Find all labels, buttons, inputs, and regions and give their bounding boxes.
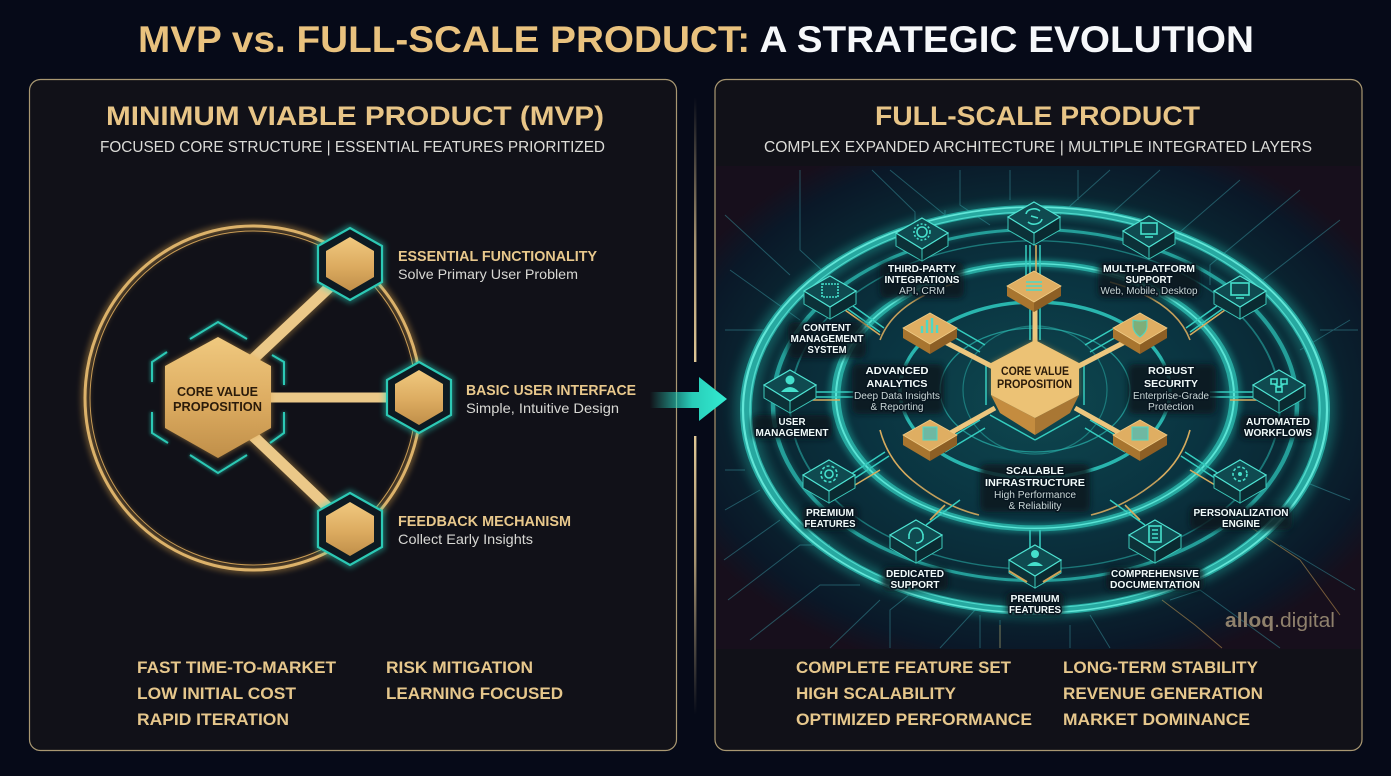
label: feedback mechanism: Collect Early Insights: [398, 531, 533, 547]
full-scale benefits list: [796, 658, 1263, 729]
label: premium features bottom: PREMIUM: [1010, 593, 1060, 605]
label: content management system: [790, 322, 864, 356]
label: scalable infrastructure: [985, 465, 1085, 512]
teal node: premium features left: [803, 460, 855, 503]
label: user management: USER: [778, 416, 806, 428]
label: personalization engine: ENGINE: [1222, 518, 1260, 530]
center divider: [694, 97, 696, 715]
panel frame: [30, 80, 676, 750]
label: content management system: CONTENT: [803, 322, 852, 334]
label: basic user interface: BASIC USER INTERFACE: [466, 382, 636, 399]
label: personalization engine: PERSONALIZATION: [1194, 507, 1288, 519]
gold node: security: [1113, 313, 1167, 354]
label: premium features left: [804, 507, 856, 530]
gold node: analytics: [903, 313, 957, 354]
teal node: documentation: [1129, 520, 1181, 563]
architecture diagram: [716, 166, 1361, 649]
panel frame: [715, 80, 1362, 750]
MVP subheading: FOCUSED CORE STRUCTURE | ESSENTIAL FEATURES PRIORITIZED: [100, 139, 605, 156]
label: automated workflows: AUTOMATED: [1246, 416, 1310, 428]
MVP benefits list: [137, 658, 563, 729]
label: advanced analytics: ANALYTICS: [866, 378, 928, 390]
ring: outer: [743, 207, 1327, 613]
core label: CORE VALUE: [1001, 366, 1069, 378]
MVP benefits list: RAPID ITERATION: [137, 710, 289, 729]
MVP benefits list: RISK MITIGATION: [386, 658, 533, 677]
gold node: infrastructure right: [1113, 420, 1167, 461]
label: premium features bottom: FEATURES: [1009, 604, 1061, 616]
teal node: third-party integrations: [896, 218, 948, 261]
label: third-party integrations: API, CRM: [899, 286, 945, 297]
teal node: automated workflows: [1253, 370, 1305, 413]
label: robust security: Enterprise-Grade: [1133, 391, 1209, 402]
teal node: user management: [764, 370, 816, 413]
label: content management system: MANAGEMENT: [790, 333, 864, 345]
label: essential functionality: ESSENTIAL FUNCTIONALITY: [398, 248, 597, 265]
arrow: MVP to full-scale: [650, 377, 727, 421]
teal node: personalization: [1214, 460, 1266, 503]
full-scale benefits list: COMPLETE FEATURE SET: [796, 658, 1012, 677]
teal node: dedicated support: [890, 520, 942, 563]
label: scalable infrastructure: High Performance: [994, 490, 1076, 501]
full-scale benefits list: OPTIMIZED PERFORMANCE: [796, 710, 1032, 729]
label: multi-platform support: MULTI-PLATFORM: [1103, 263, 1195, 275]
label: scalable infrastructure: & Reliability: [1008, 501, 1062, 512]
label: premium features bottom: [1009, 593, 1061, 616]
full-scale benefits list: MARKET DOMINANCE: [1063, 710, 1250, 729]
MVP benefits list: LOW INITIAL COST: [137, 684, 297, 703]
MVP heading: MINIMUM VIABLE PRODUCT (MVP): [106, 101, 604, 131]
label: dedicated support: [886, 568, 944, 591]
label: multi-platform support: Web, Mobile, Desktop: [1100, 286, 1198, 297]
label: advanced analytics: Deep Data Insights: [854, 391, 940, 402]
label: robust security: SECURITY: [1144, 378, 1198, 390]
label: third-party integrations: [884, 263, 960, 297]
label: feedback mechanism: [398, 513, 571, 547]
diagram background: [716, 166, 1361, 649]
label: basic user interface: [466, 382, 636, 416]
label: user management: [756, 416, 829, 439]
node: essential functionality: [318, 228, 382, 300]
panel: full-scale product: [715, 80, 1362, 750]
label: multi-platform support: [1100, 263, 1198, 297]
label: premium features left: FEATURES: [804, 518, 856, 530]
rings: middle: [773, 229, 1297, 581]
gold node: top: [1007, 271, 1061, 312]
MVP benefits list: LEARNING FOCUSED: [386, 684, 563, 703]
teal node: device: [1214, 276, 1266, 319]
label: content management system: SYSTEM: [808, 344, 847, 356]
connector lines: [812, 245, 1258, 548]
label: multi-platform support: SUPPORT: [1126, 274, 1173, 286]
label: scalable infrastructure: INFRASTRUCTURE: [985, 477, 1085, 489]
label: dedicated support: DEDICATED: [886, 568, 944, 580]
circuit traces: [724, 170, 1358, 648]
label: scalable infrastructure: SCALABLE: [1006, 465, 1064, 477]
label: robust security: Protection: [1148, 402, 1194, 413]
full-scale benefits list: LONG-TERM STABILITY: [1063, 658, 1259, 677]
full-scale benefits list: REVENUE GENERATION: [1063, 684, 1263, 703]
label: comprehensive documentation: [1110, 568, 1200, 591]
core 3D hexagon: [991, 340, 1079, 435]
label: advanced analytics: [854, 365, 940, 413]
panel: MVP: [30, 80, 676, 750]
label: comprehensive documentation: COMPREHENSIVE: [1111, 568, 1199, 580]
label: basic user interface: Simple, Intuitive Design: [466, 400, 619, 416]
label: robust security: [1133, 365, 1209, 413]
connectors from core: [250, 282, 398, 514]
teal node: content management: [804, 276, 856, 319]
teal node: premium bottom: [1009, 545, 1061, 588]
label: user management: MANAGEMENT: [756, 427, 829, 439]
core label: PROPOSITION: [173, 399, 262, 414]
label: third-party integrations: INTEGRATIONS: [884, 274, 960, 286]
label: essential functionality: Solve Primary User Problem: [398, 266, 578, 282]
node: feedback mechanism: [318, 493, 382, 565]
full-scale benefits list: HIGH SCALABILITY: [796, 684, 957, 703]
title: MVP vs. FULL-SCALE PRODUCT: A STRATEGIC EVOLUTION: [138, 19, 1254, 60]
gold node: infrastructure left: [903, 420, 957, 461]
core label: PROPOSITION: [997, 379, 1072, 391]
core label: CORE VALUE: [177, 384, 258, 399]
full-scale subheading: COMPLEX EXPANDED ARCHITECTURE | MULTIPLE INTEGRATED LAYERS: [764, 139, 1312, 156]
teal node: multi-platform: [1123, 216, 1175, 259]
core hexagon: [152, 322, 284, 473]
label: essential functionality: [398, 248, 597, 282]
node: basic user interface: [387, 362, 451, 433]
teal node: top centre: [1008, 202, 1060, 245]
label: personalization engine: [1194, 507, 1288, 530]
label: automated workflows: [1244, 416, 1312, 439]
watermark: alloq.digital: [1225, 610, 1335, 632]
full-scale heading: FULL-SCALE PRODUCT: [875, 101, 1201, 131]
label: automated workflows: WORKFLOWS: [1244, 427, 1312, 439]
core bracket outline: [152, 322, 284, 473]
label: comprehensive documentation: DOCUMENTATION: [1110, 579, 1200, 591]
ring: gold arcs: [880, 282, 1190, 515]
label: third-party integrations: THIRD-PARTY: [888, 263, 956, 275]
core bracket glow: [152, 322, 284, 473]
label: dedicated support: SUPPORT: [890, 579, 940, 591]
MVP outer ring: [85, 226, 421, 570]
label: feedback mechanism: FEEDBACK MECHANISM: [398, 513, 571, 530]
MVP benefits list: FAST TIME-TO-MARKET: [137, 658, 337, 677]
label shadows: [752, 262, 1316, 616]
rings: core: [900, 302, 1170, 478]
label: advanced analytics: ADVANCED: [866, 365, 929, 377]
ring: inner thick: [836, 264, 1234, 528]
label: robust security: ROBUST: [1148, 365, 1195, 377]
label: advanced analytics: & Reporting: [870, 402, 924, 413]
label: premium features left: PREMIUM: [806, 507, 854, 519]
